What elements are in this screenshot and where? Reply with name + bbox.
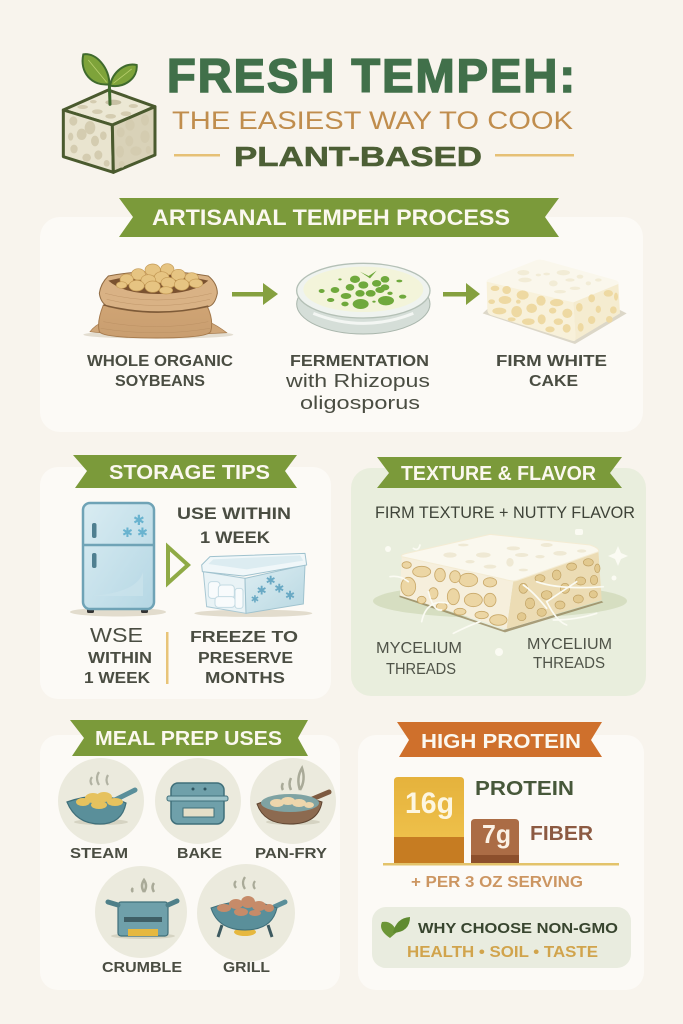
icon: freezer container: ✱: [266, 574, 276, 588]
icon: tempeh cube with sprout: [63, 54, 155, 172]
icon: refrigerator: ✱: [137, 525, 148, 540]
icon: refrigerator: ✱: [133, 512, 145, 528]
heading banner: process: ARTISANAL TEMPEH PROCESS: [152, 205, 510, 230]
label: mycelium threads right: MYCELIUM: [527, 636, 612, 653]
label: firm white cake: [496, 353, 607, 390]
icon: freezer container: ✱: [274, 581, 284, 595]
label: mycelium threads left: THREADS: [386, 661, 456, 678]
icon: grill: [197, 864, 295, 962]
chart: protein and fiber bars: 7g: [482, 819, 511, 849]
heading banner: storage tips: [73, 455, 297, 488]
chart: protein and fiber bars: FIBER: [530, 823, 594, 845]
label: pan-fry: PAN-FRY: [255, 845, 327, 862]
arrow: soybeans to fermentation: [232, 283, 278, 305]
callout: why choose non-gmo: HEALTH • SOIL • TASTE: [407, 944, 598, 961]
label: fermentation with Rhizopus oligosporus: FERMENTATION: [290, 353, 429, 370]
label: mycelium threads right: THREADS: [533, 655, 605, 672]
label: freeze to preserve months: PRESERVE: [198, 650, 293, 667]
label: wse within 1 week: WSE: [90, 625, 143, 647]
icon: firm white tempeh cake: [483, 260, 627, 344]
icon: freezer container: [194, 553, 312, 617]
icon: petri dish: [297, 263, 430, 334]
panel: meal prep uses: [40, 720, 340, 990]
icon: sack of soybeans: [83, 264, 233, 339]
title: FRESH TEMPEH:: [167, 49, 575, 102]
label: freeze to preserve months: [190, 629, 298, 687]
label: fermentation with Rhizopus oligosporus: [285, 353, 430, 413]
heading banner: process: [119, 198, 559, 237]
text: per serving: + PER 3 OZ SERVING: [411, 874, 583, 891]
illustration: tempeh block with mycelium threads: [373, 529, 628, 656]
label: crumble: CRUMBLE: [102, 959, 182, 976]
heading banner: meal prep uses: [70, 720, 308, 756]
heading banner: high protein: HIGH PROTEIN: [421, 731, 581, 753]
label: use within 1 week: 1 WEEK: [200, 528, 271, 547]
label: wse within 1 week: [84, 625, 152, 687]
label: steam: STEAM: [70, 845, 128, 862]
label: wse within 1 week: 1 WEEK: [84, 670, 150, 687]
subtitle emphasis: plant-based: PLANT-BASED: [234, 141, 482, 172]
label: fermentation with Rhizopus oligosporus: with Rhizopus: [285, 371, 430, 391]
panel: texture and flavor: [351, 457, 646, 696]
chart: protein and fiber bars: 16g: [405, 787, 454, 820]
icon: bake oven: [155, 758, 241, 844]
label: use within 1 week: [177, 504, 291, 547]
label: mycelium threads left: MYCELIUM: [376, 640, 462, 657]
icon: refrigerator: ✱: [122, 525, 133, 540]
label: fermentation with Rhizopus oligosporus: oligosporus: [300, 393, 420, 413]
label: wse within 1 week: WITHIN: [88, 650, 152, 667]
label: bake: BAKE: [177, 845, 222, 862]
panel: high protein: [358, 722, 644, 990]
arrow: triangle: [168, 547, 188, 583]
heading banner: high protein: [397, 722, 602, 757]
label: firm white cake: FIRM WHITE: [496, 353, 607, 370]
label: use within 1 week: USE WITHIN: [177, 504, 291, 523]
panel: artisanal tempeh process: [40, 198, 643, 432]
label: freeze to preserve months: FREEZE TO: [190, 629, 298, 646]
icon: freezer container: ✱: [285, 589, 295, 603]
arrow: fermentation to cake: [443, 283, 480, 305]
label: whole organic soybeans: SOYBEANS: [115, 373, 205, 390]
callout: why choose non-gmo: [372, 907, 631, 968]
label: whole organic soybeans: WHOLE ORGANIC: [87, 353, 233, 370]
icon: freezer container: ✱: [257, 584, 267, 598]
heading banner: storage tips: STORAGE TIPS: [109, 462, 270, 484]
heading banner: texture and flavor: TEXTURE & FLAVOR: [401, 463, 597, 485]
label: mycelium threads right: [527, 636, 612, 672]
panel: storage tips: [40, 455, 331, 699]
label: firm white cake: CAKE: [529, 373, 578, 390]
icon: steam pan: [58, 758, 144, 844]
label: whole organic soybeans: [87, 353, 233, 390]
chart: protein and fiber bars: [383, 777, 619, 866]
heading banner: meal prep uses: MEAL PREP USES: [95, 728, 282, 750]
icon: crumble appliance: [95, 866, 187, 958]
icon: leaf: [381, 917, 410, 938]
icon: pan-fry pan: [250, 758, 336, 844]
subtitle: THE EASIEST WAY TO COOK: [172, 107, 573, 135]
label: grill: GRILL: [223, 959, 270, 976]
heading banner: texture and flavor: [377, 457, 622, 488]
chart: protein and fiber bars: PROTEIN: [475, 778, 574, 800]
callout: why choose non-gmo: WHY CHOOSE NON-GMO: [418, 920, 618, 937]
text: firm texture nutty flavor: FIRM TEXTURE + NUTTY FLAVOR: [375, 503, 635, 522]
label: freeze to preserve months: MONTHS: [205, 670, 285, 687]
label: mycelium threads left: [376, 640, 462, 678]
icon: refrigerator: [70, 503, 166, 616]
icon: freezer container: ✱: [251, 594, 259, 605]
